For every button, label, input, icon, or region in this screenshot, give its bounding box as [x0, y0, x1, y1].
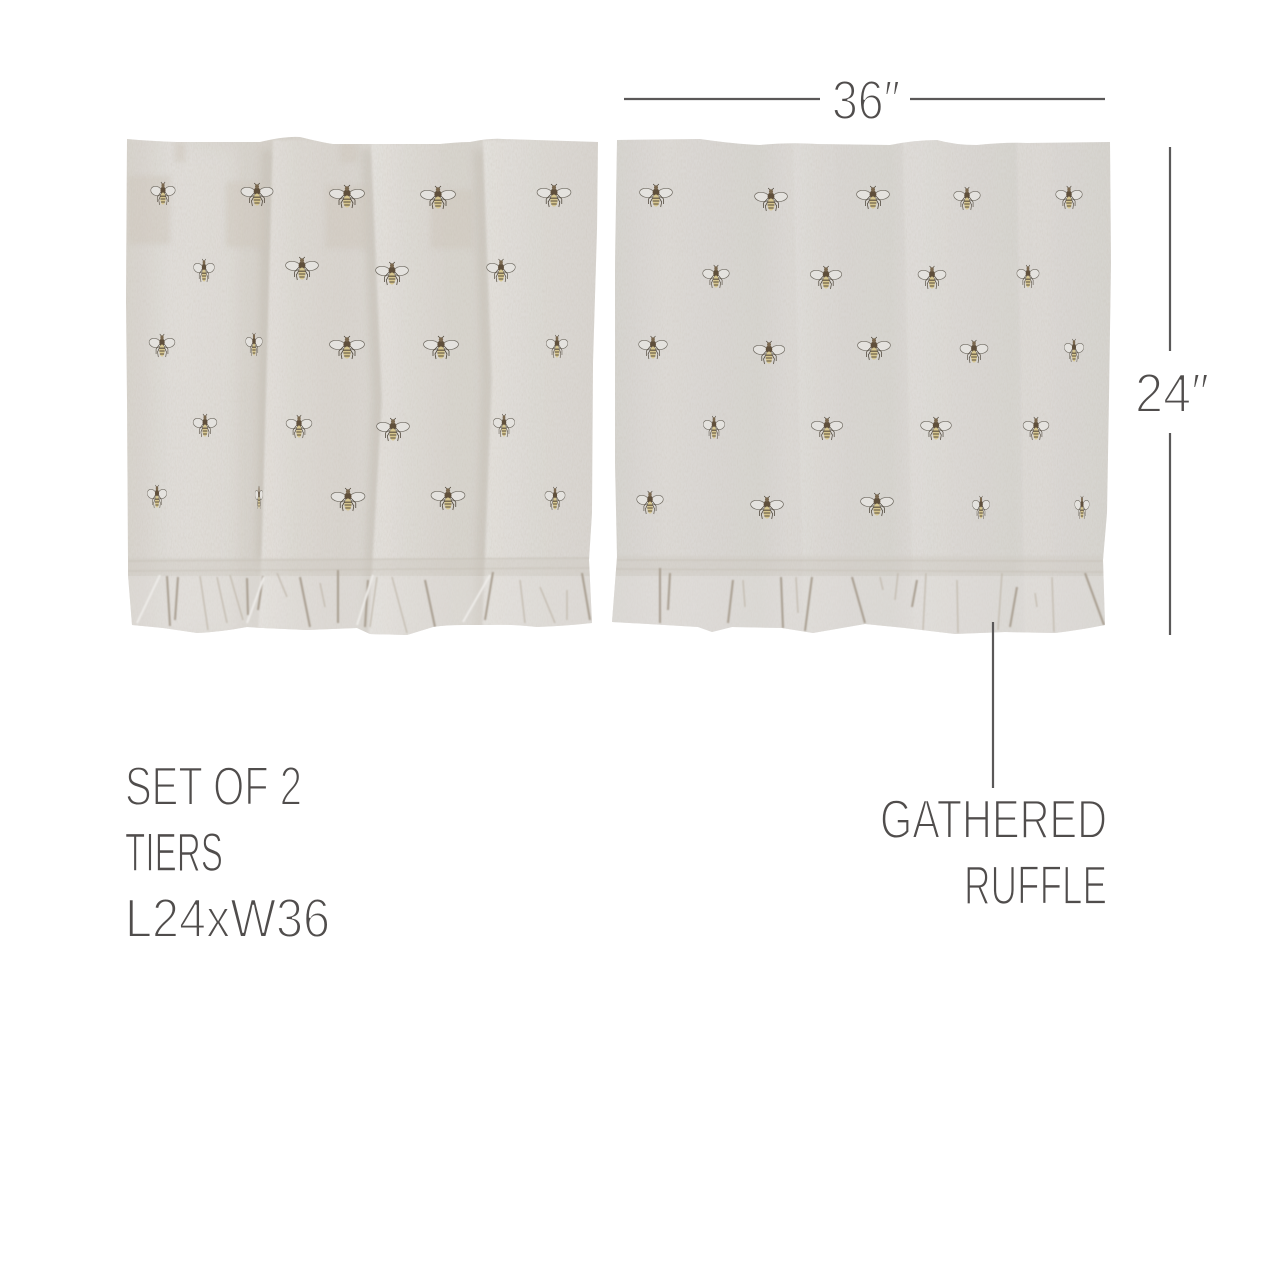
callout: gathered ruffle: RUFFLE — [964, 854, 1107, 916]
width dimension: 36 inches: 36″ — [832, 69, 900, 131]
gathered seam band — [166, 560, 518, 575]
bees: left curtain — [147, 182, 572, 511]
callout leader line to ruffle — [992, 622, 994, 788]
height dimension: 24 inches: 24″ — [1135, 362, 1209, 424]
text block: set details: TIERS — [125, 821, 223, 883]
linen texture — [155, 148, 553, 558]
overall fabric tone — [126, 137, 598, 576]
ruffle shading — [130, 576, 484, 632]
callout: gathered ruffle: GATHERED — [880, 788, 1107, 850]
fold: right curtain soft creases — [793, 140, 1065, 640]
overall fabric tone — [615, 139, 1111, 576]
ruffle pleats — [660, 568, 1104, 633]
text block: set details: SET OF 2 — [125, 755, 302, 817]
panel: left curtain tier — [120, 130, 610, 640]
fold: left curtain first sharp fold — [259, 140, 292, 628]
gathered seam band — [802, 558, 943, 574]
callout: gathered ruffle — [880, 788, 1107, 916]
gather ticks — [128, 558, 592, 571]
gather ticks — [658, 560, 1075, 572]
text block: set details: L24xW36 — [125, 887, 330, 949]
fold: left curtain second sharp fold — [368, 144, 396, 634]
fold: left curtain third sharp fold — [482, 140, 499, 625]
pocket stitching patches — [132, 142, 450, 246]
fold shadows on left curtain — [256, 150, 492, 640]
linen texture — [649, 144, 1060, 536]
text block: set details — [125, 755, 330, 949]
panel: right curtain tier — [605, 130, 1115, 640]
fold: left curtain soft highlight — [175, 150, 235, 630]
ruffle shading — [605, 576, 1115, 640]
bees: right curtain — [636, 184, 1090, 519]
ruffle pleats — [137, 570, 590, 633]
